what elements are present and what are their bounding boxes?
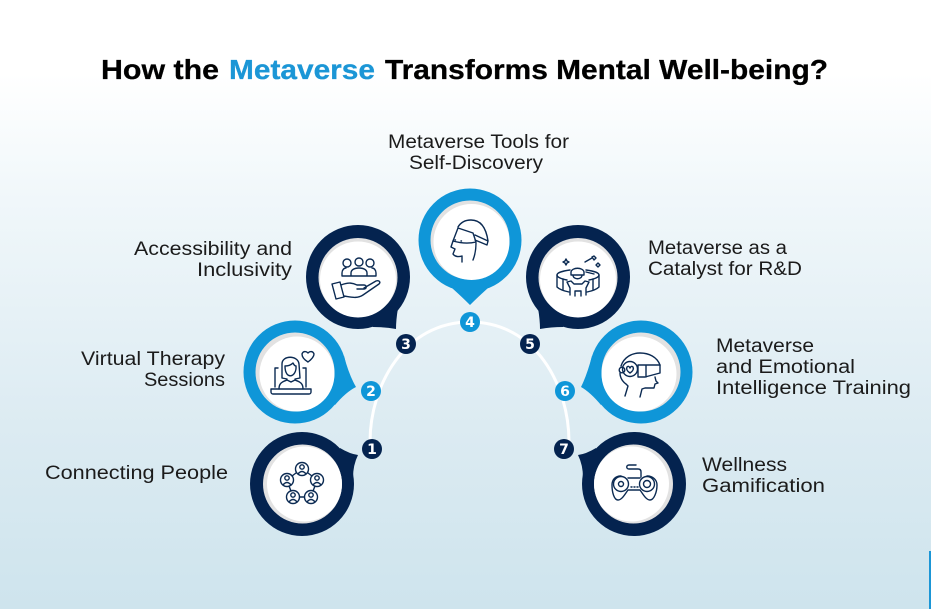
label: accessibility and inclusivity [134,239,293,281]
step 1: connecting people [45,432,382,536]
label: virtual therapy sessions [81,349,226,391]
step 2: virtual therapy [81,320,381,424]
step 7: gamification [554,432,825,536]
step 4: self-discovery [388,132,570,332]
badge 7 [554,439,574,459]
title: Metaverse [229,54,375,85]
label: wellness gamification: Gamification [702,476,825,497]
badge 1: 1 [367,442,377,458]
step 6: emotional intelligence [555,320,911,424]
label: virtual therapy sessions: Virtual Therapy [81,349,226,370]
badge 6 [555,381,575,401]
step 5: research [520,225,802,354]
marker 3 [306,225,410,329]
label: catalyst for r and d: Metaverse as a [648,238,787,259]
label: metaverse tools: Self-Discovery [409,153,544,174]
badge 4 [460,312,480,332]
label: connecting people: Connecting People [45,463,228,484]
badge 3: 3 [401,337,411,353]
step 3: accessibility [134,225,416,354]
icon: game controller [612,465,657,500]
icon: head with heart brain and goggles [619,353,660,397]
title: Transforms Mental Well-being? [385,54,828,85]
badge 1 [362,439,382,459]
label: wellness gamification: Wellness [702,455,787,476]
icon: hand holding people [332,258,380,299]
label: emotional intelligence: Metaverse [716,336,814,357]
title [101,54,828,85]
title: How the [101,54,219,85]
marker 5 [526,225,630,329]
label: emotional intelligence: Intelligence Training [716,378,911,399]
label: emotional intelligence: and Emotional [716,357,855,378]
label: catalyst for r and d: Catalyst for R&D [648,259,802,280]
icon: network of people [280,462,324,504]
icon: head with headset [451,220,488,262]
badge 6: 6 [560,384,570,400]
connecting arc [370,322,569,442]
badge 2 [361,381,381,401]
marker 4 [418,188,522,305]
label: catalyst for r and d [648,238,802,280]
icon: therapy laptop [271,352,314,394]
marker 6 [581,320,692,424]
label: emotional intelligence [716,336,911,399]
badge 5 [520,334,540,354]
label: accessibility and inclusivity: Inclusivity [197,260,293,281]
badge 2: 2 [366,384,376,400]
marker 1 [250,432,358,536]
marker 7 [578,432,686,536]
marker 2 [244,320,356,424]
icon: person in virtual room [557,256,600,296]
label: metaverse tools [388,132,570,174]
label: virtual therapy sessions: Sessions [144,370,225,391]
badge 4: 4 [465,315,475,331]
badge 3 [396,334,416,354]
label: wellness gamification [702,455,825,497]
label: accessibility and inclusivity: Accessibility and [134,239,292,260]
badge 7: 7 [559,442,569,458]
label: metaverse tools: Metaverse Tools for [388,132,570,153]
badge 5: 5 [525,337,535,353]
